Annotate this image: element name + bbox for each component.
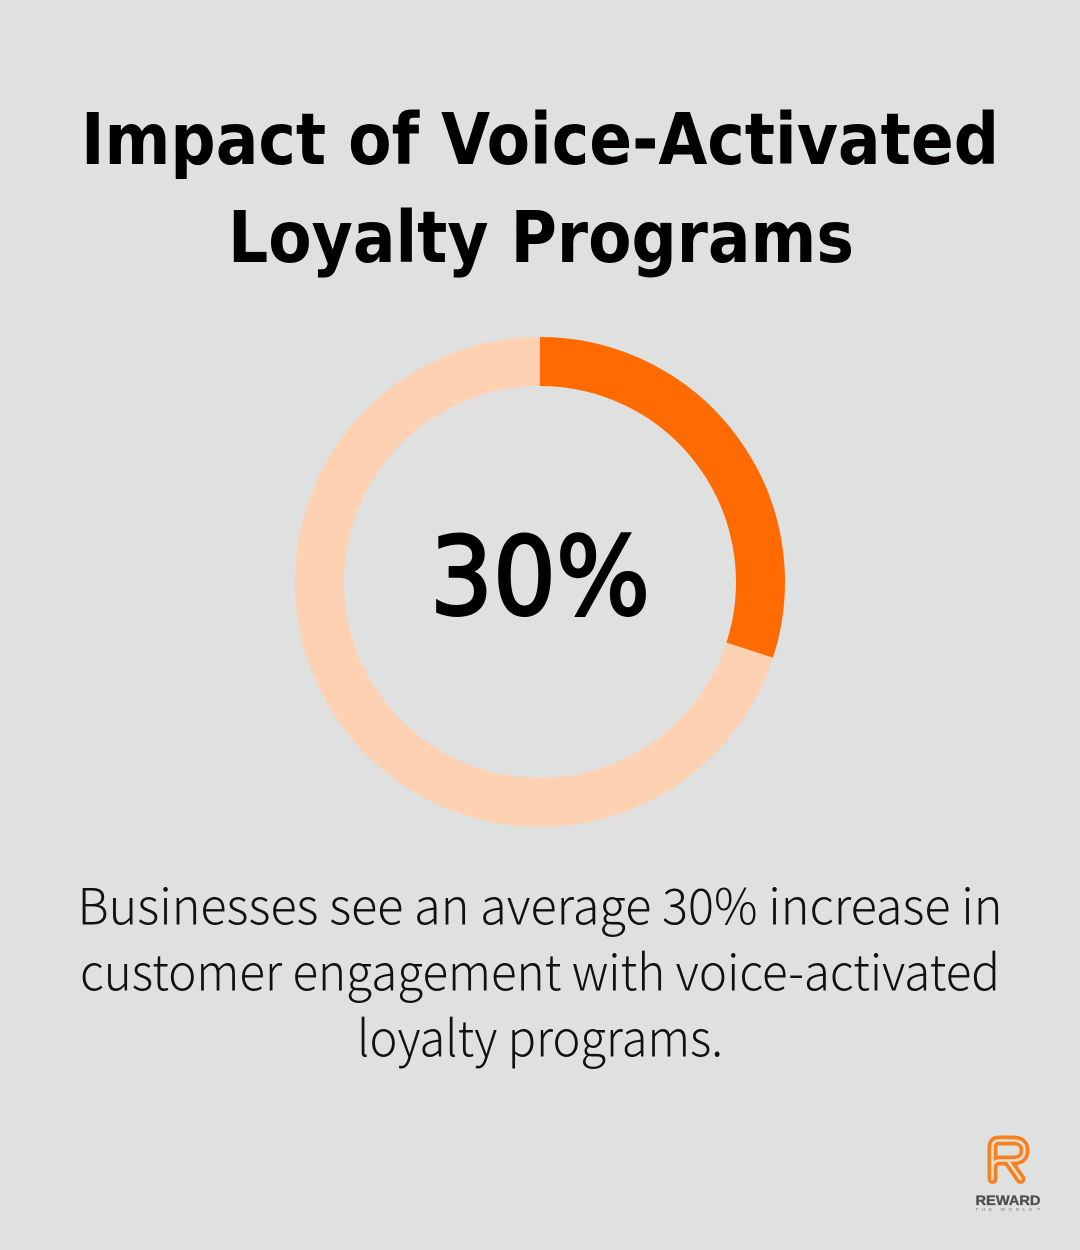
description text: loyalty programs. bbox=[357, 1000, 723, 1072]
donut centre value: 30% bbox=[430, 515, 650, 640]
logo tagline: THE WORLD™ bbox=[976, 1207, 1040, 1212]
title: Loyalty Programs bbox=[228, 196, 854, 279]
logo: Reward the World bbox=[976, 1140, 1041, 1212]
description text: customer engagement with voice-activated bbox=[80, 934, 1000, 1006]
title bbox=[81, 98, 999, 279]
icon: R mark bbox=[992, 1140, 1024, 1179]
logo wordmark: REWARD bbox=[976, 1193, 1041, 1208]
donut chart: 30% bbox=[320, 362, 760, 802]
description text bbox=[78, 868, 1002, 1072]
description text: Businesses see an average 30% increase in bbox=[78, 868, 1002, 940]
